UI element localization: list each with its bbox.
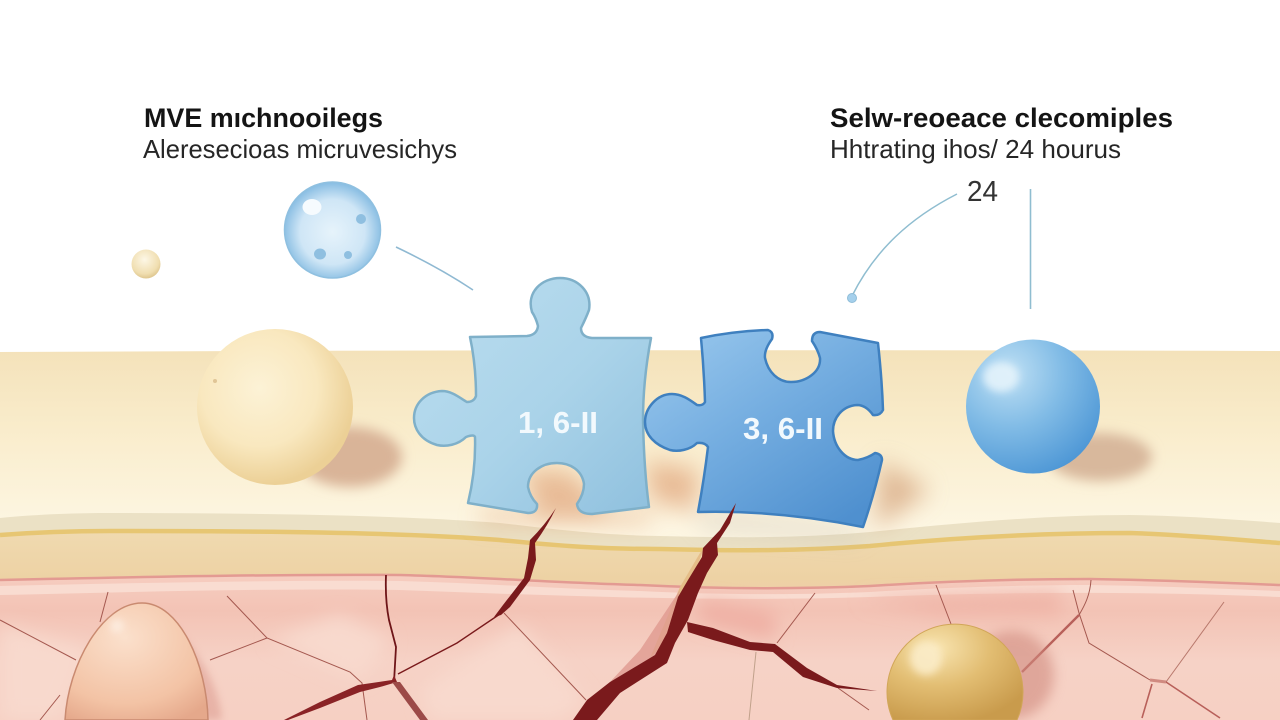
skin layer: cream surface xyxy=(0,350,1280,570)
thin cracks in the tissue xyxy=(0,580,1224,720)
crack: right main xyxy=(573,503,877,720)
puzzle label: 1, 6-II: 1, 6-II xyxy=(518,405,598,440)
skin layer: beige band xyxy=(0,513,1280,560)
icon: large cream ball xyxy=(197,329,353,485)
puzzle piece: 1, 6-II xyxy=(414,278,651,514)
connector line: 24 to puzzle xyxy=(848,194,957,302)
number: 24: 24 xyxy=(967,176,998,208)
skin layer: pink tissue xyxy=(0,575,1280,720)
icon: blue ball xyxy=(966,340,1100,474)
puzzle piece: 3, 6-II xyxy=(645,330,883,527)
icon: small cream bead xyxy=(132,250,160,278)
pink tissue: pale and deep patches xyxy=(0,594,1060,720)
puzzle label: 3, 6-II: 3, 6-II xyxy=(743,411,823,446)
shadows: puzzle pieces xyxy=(480,460,930,538)
connector line: vesicle to puzzle xyxy=(396,247,473,290)
subheading: right: Hhtrating ihos/ 24 hourus xyxy=(830,134,1121,164)
shadow: cream ball xyxy=(298,427,402,487)
icon: microvesicle xyxy=(284,182,380,278)
vertical connector line xyxy=(1030,189,1032,309)
shadow: egg cell xyxy=(170,625,222,720)
heading: right: Selw-reoeace clecomiples xyxy=(830,103,1173,133)
skin layer: tan dermis band xyxy=(0,531,1280,610)
crack: left main xyxy=(284,508,556,720)
subheading: left: Aleresecioas micruvesichys xyxy=(143,134,457,164)
pink tissue: light highlight band xyxy=(0,581,1280,599)
shadow: gold ball xyxy=(970,631,1054,719)
heading: left: MVE mıchnooilegs xyxy=(144,103,383,133)
skin layer: gold line xyxy=(0,531,1280,550)
egg cell xyxy=(65,603,208,720)
pink tissue: red boundary line xyxy=(0,575,1280,588)
gold ball xyxy=(887,624,1023,720)
background: white sky xyxy=(0,0,1280,360)
shadow: blue ball xyxy=(1048,433,1152,481)
